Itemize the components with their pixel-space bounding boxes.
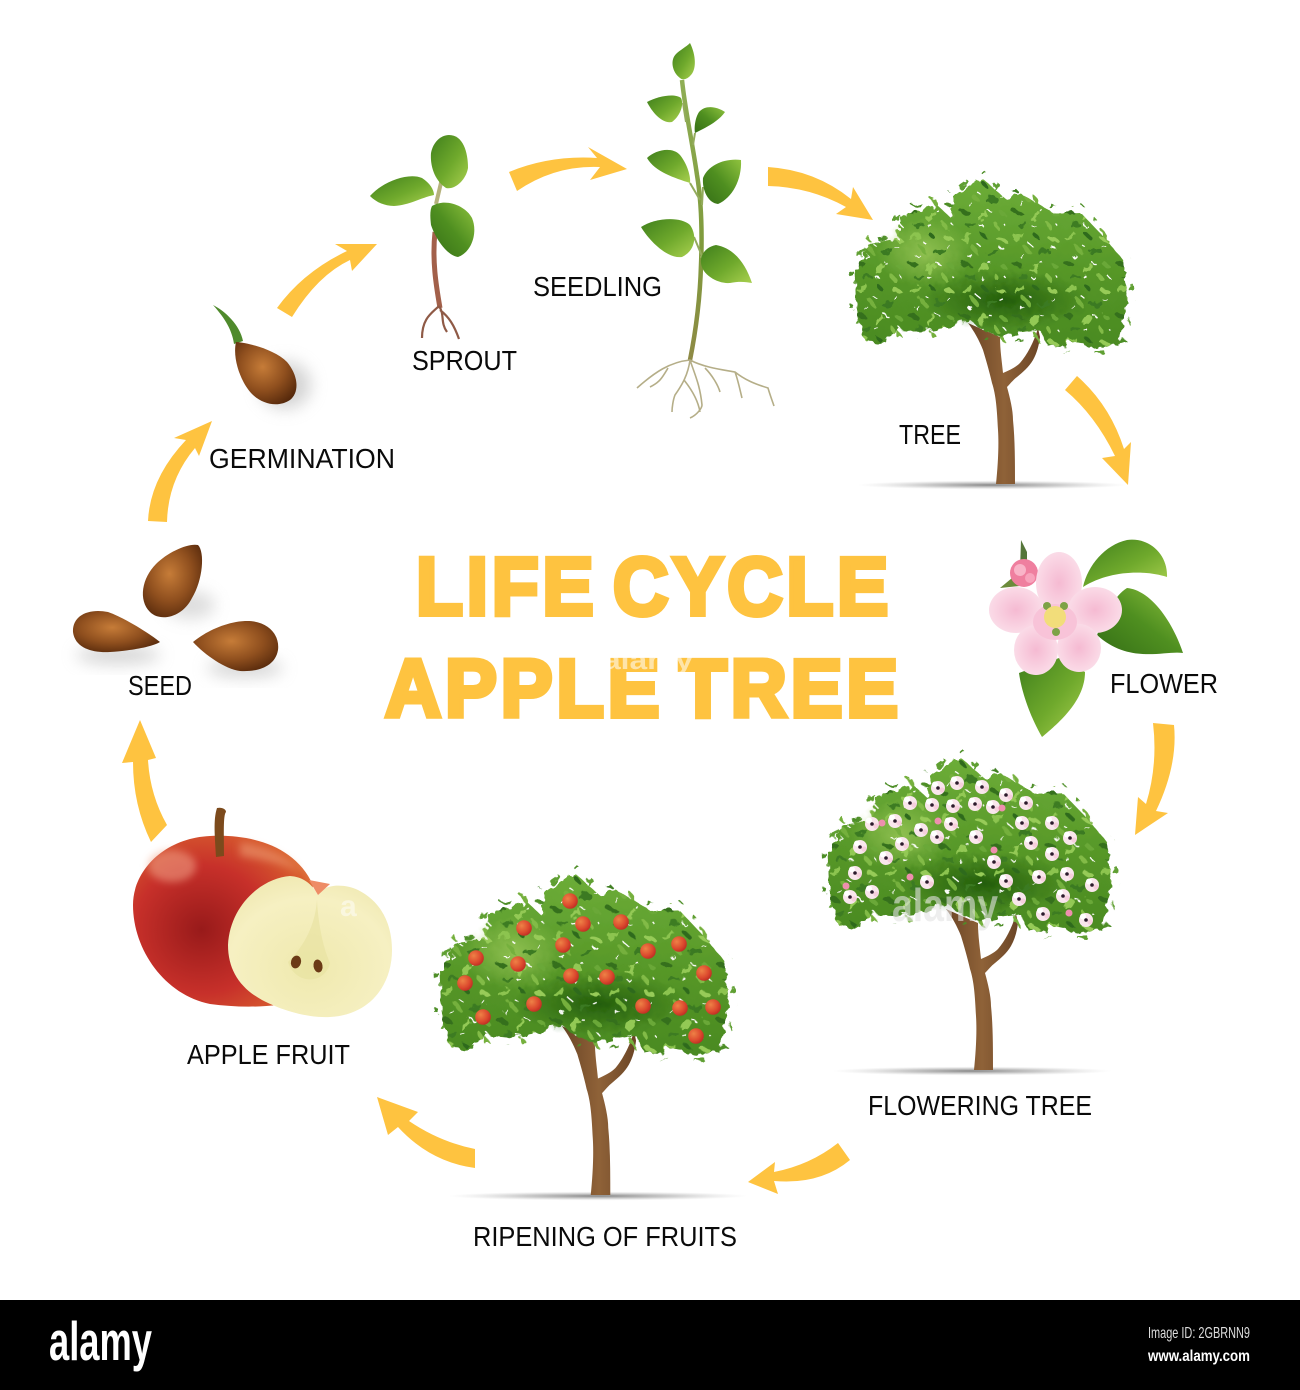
label: germination: GERMINATION	[209, 443, 395, 474]
label: seed: SEED	[128, 670, 192, 701]
icon: apple fruit: a	[340, 890, 357, 923]
title: APPLE TREE	[385, 644, 902, 734]
icon: flower	[989, 540, 1183, 737]
label: seedling: SEEDLING	[533, 271, 662, 302]
tree: bare green tree	[855, 178, 1128, 490]
blossoms	[842, 776, 1099, 927]
arrow: germination to sprout	[277, 244, 377, 317]
footer logo: alamy	[49, 1310, 152, 1372]
stage labels	[128, 271, 1218, 1252]
title: LIFE CYCLE	[416, 542, 892, 632]
arrow: flowering tree to ripening	[748, 1143, 850, 1194]
footer image id: Image ID: 2GBRNN9	[1148, 1325, 1250, 1342]
tree: fruiting tree	[440, 873, 748, 1200]
arrow: tree to flower	[1065, 376, 1131, 485]
arrow: flower to flowering tree	[1135, 723, 1175, 835]
label: tree: TREE	[899, 419, 961, 450]
tree: flowering tree	[828, 757, 1112, 1076]
footer bar	[0, 1300, 1300, 1390]
title: alamy	[603, 645, 694, 675]
arrows: cycle	[122, 147, 1175, 1194]
label: flower: FLOWER	[1110, 668, 1218, 699]
icon: apple fruit	[133, 808, 392, 1017]
label: sprout: SPROUT	[412, 345, 517, 376]
footer url: www.alamy.com	[1147, 1348, 1250, 1365]
title	[385, 542, 902, 734]
arrow: apple fruit to seed	[122, 720, 167, 842]
arrow: seedling to tree	[768, 167, 873, 220]
arrow: sprout to seedling	[509, 147, 627, 191]
apples on tree	[457, 893, 721, 1044]
label: flowering tree: FLOWERING TREE	[868, 1090, 1092, 1121]
icon: seedling	[637, 43, 774, 418]
icon: sprout	[370, 135, 474, 339]
arrow: seed to germination	[148, 421, 212, 522]
icon: seeds	[73, 545, 283, 677]
tree: flowering tree: alamy	[892, 879, 998, 931]
label: apple fruit: APPLE FRUIT	[187, 1039, 350, 1070]
arrow: ripening to apple fruit	[377, 1097, 475, 1168]
label: ripening of fruits: RIPENING OF FRUITS	[473, 1221, 737, 1252]
icon: germinating seed	[213, 305, 311, 409]
